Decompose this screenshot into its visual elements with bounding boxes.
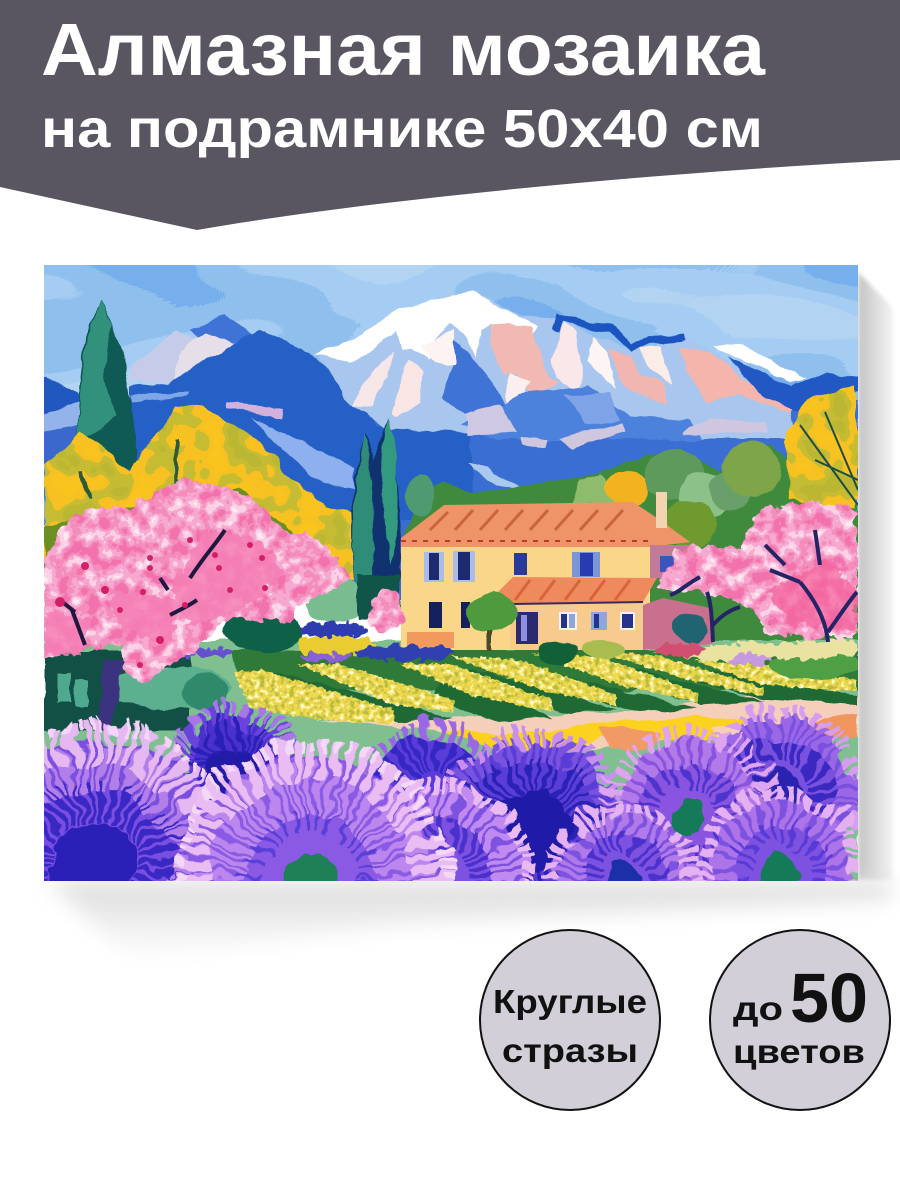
meadow ground [44,640,858,881]
lavender field [44,696,858,881]
right yellow tree [785,385,858,510]
header banner [0,0,900,230]
farmhouse [401,492,713,652]
flower beds near the house [175,622,857,666]
lavender bush large centre [166,737,536,881]
canvas drop shadow [50,272,893,960]
badge: up to 50 colours: цветов [733,1033,865,1070]
upper walls [401,545,650,650]
garden bushes [58,575,861,730]
lower wall [510,603,643,650]
pink blossom trees right [657,500,857,642]
mountains [44,293,858,600]
title: Алмазная мозаика [41,8,766,91]
left yellow and olive trees [44,405,354,600]
upper roof [401,502,690,547]
lavender bush dark left [170,708,298,836]
left cypress [76,300,136,470]
badge: up to 50 colours: до [733,990,783,1027]
badge: round rhinestones [480,930,660,1110]
lavender bush dark centre [364,713,622,881]
badge: round rhinestones: стразы [502,1032,638,1069]
dark furrows [257,662,857,722]
background green trees [404,443,858,650]
lavender bush right back [706,702,858,840]
yellow blossoming rows [234,650,857,724]
painting: Provence landscape [44,265,858,881]
lower roof [493,577,657,604]
lavender bush right middle [608,733,772,897]
mauve wing [650,545,690,578]
flower rows [234,650,857,724]
lavender bush large left [44,715,221,881]
centre cypress pair [353,418,400,600]
badge: round rhinestones: Круглые [493,983,647,1020]
sky [44,265,858,525]
garden tree [467,594,517,652]
lavender bush right front [696,786,858,881]
windows [424,551,675,644]
lavender bush bottom right small [541,803,704,881]
small pink bush by the house [369,591,403,635]
badge: up to 50 colours: 50 [790,959,868,1037]
pink blossom tree left [44,478,350,682]
chimney [656,492,667,528]
subtitle: на подрамнике 50х40 см [41,99,763,159]
badge: up to 50 colours [710,930,890,1110]
